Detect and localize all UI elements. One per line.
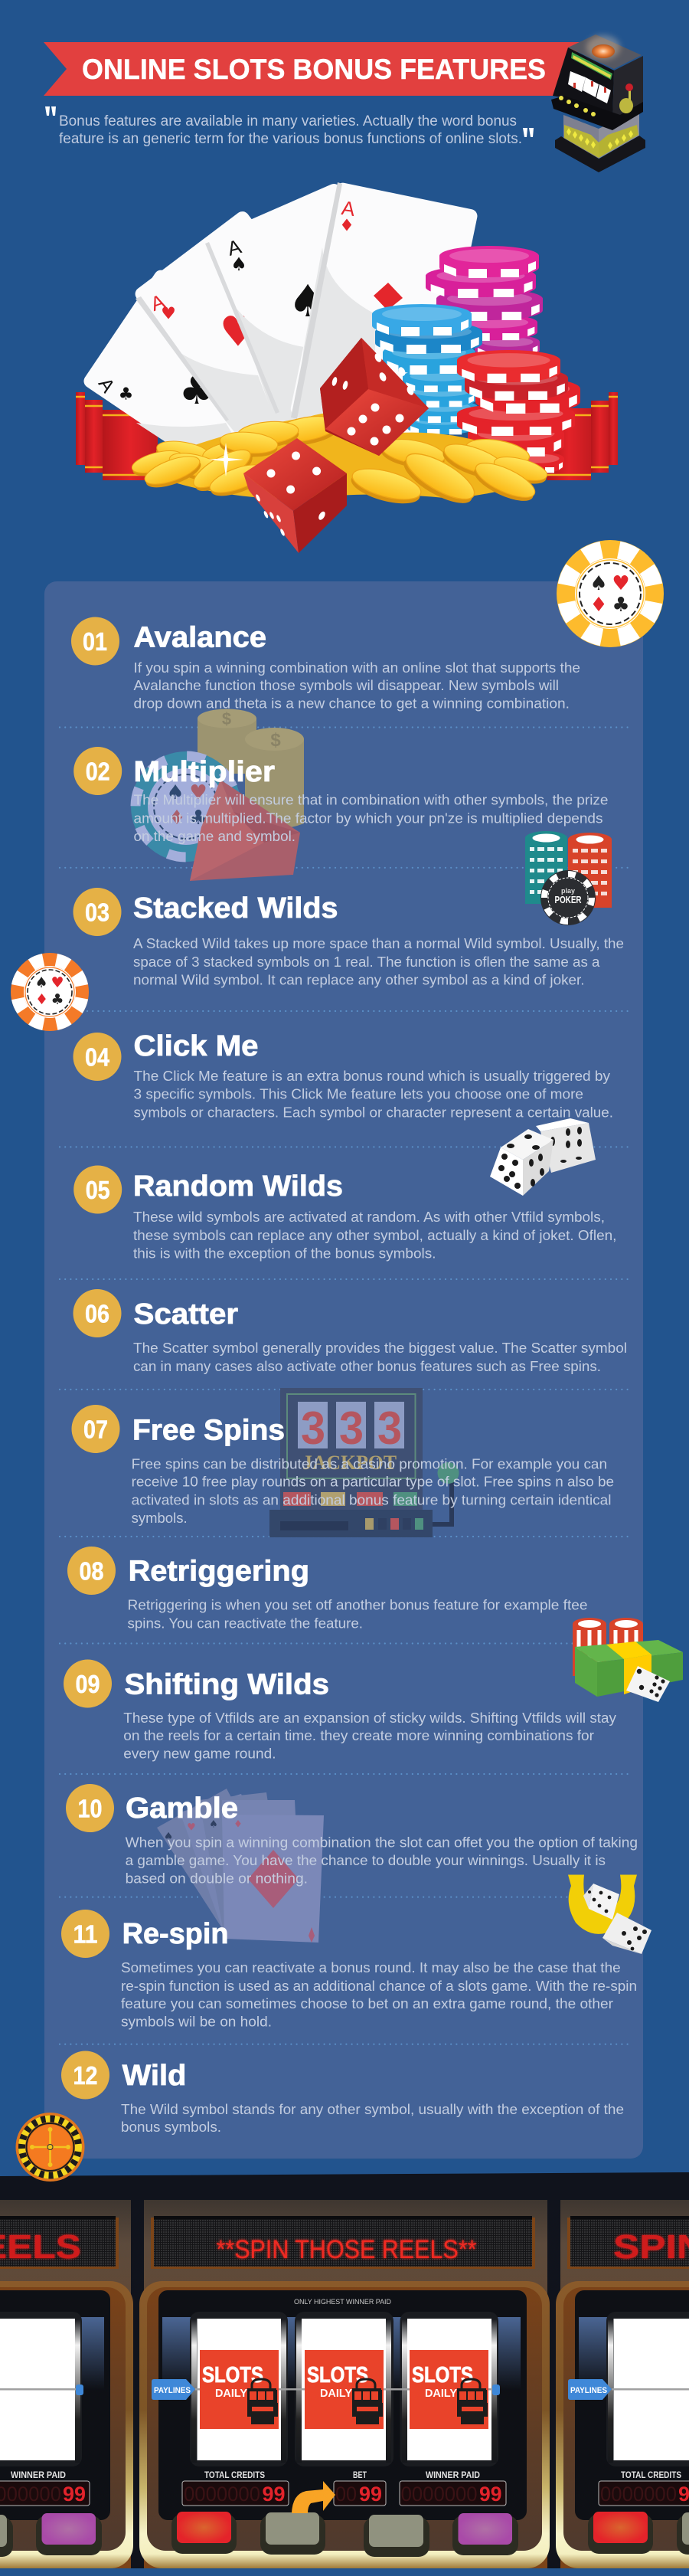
card: ace of diamonds: A xyxy=(340,196,357,221)
body 12: The Wild symbol stands for any other symbol, usually with the exception of the xyxy=(121,2102,624,2117)
body 12 xyxy=(121,2102,624,2135)
faded icon: chip, coins and ruby: ♦ xyxy=(168,807,186,830)
credit readouts: 99 xyxy=(359,2483,382,2506)
credit readouts: 99 xyxy=(479,2483,502,2506)
intro quote: feature is an generic term for the various bonus functions of online slots. xyxy=(59,131,522,147)
card: ace of clubs xyxy=(81,267,324,495)
feature 04: Click Me xyxy=(73,1030,613,1121)
number badge 10 xyxy=(66,1784,114,1832)
heading 04: Click Me xyxy=(133,1030,259,1062)
faded icon: chip, coins and ruby: $ xyxy=(222,709,231,728)
feature 06: Scatter xyxy=(73,1289,627,1374)
machine: left, cropped: WINNER PAID xyxy=(11,2471,66,2480)
card: ace of diamonds: ♦ xyxy=(339,216,354,236)
icon: yellow poker chip xyxy=(557,540,664,647)
body 08 xyxy=(127,1597,588,1631)
card: ace of spades: ♠ xyxy=(230,254,247,275)
icon: white dice xyxy=(490,1118,596,1196)
body 04: symbols or characters. Each symbol or character represent a certain value. xyxy=(133,1105,613,1121)
machine: right, cropped: PAYLINES xyxy=(570,2386,607,2395)
faded icon: jackpot slot machine: 3 xyxy=(339,1403,364,1454)
heading 02: Multiplier xyxy=(133,756,275,788)
panel: features background xyxy=(44,581,643,2159)
body 11: feature you can sometimes choose to bet on an extra game round, the other xyxy=(121,1996,613,2011)
body 03: normal Wild symbol. It can replace any other symbol as a kind of joker. xyxy=(133,972,585,987)
icon: poker chip stacks xyxy=(525,831,612,925)
number badge 03: 03 xyxy=(85,898,109,927)
heading 01: Avalance xyxy=(133,622,266,654)
number badge 07: 07 xyxy=(83,1416,108,1443)
body 02: amount is multiplied.The factor by which your pn'ze is multiplied depends xyxy=(133,810,603,826)
credit readouts xyxy=(184,2471,502,2506)
card: ace of clubs: A xyxy=(94,374,119,397)
body 03 xyxy=(133,936,624,987)
faded icon: chip, coins and ruby xyxy=(131,709,304,881)
hero illustration: cards, chips, coins and dice xyxy=(76,182,618,553)
feature 10: Gamble xyxy=(66,1784,638,1887)
number badge 07 xyxy=(72,1405,119,1453)
reel logo 2 xyxy=(305,2350,384,2429)
faded icon: fan of cards: ♦ xyxy=(233,1818,243,1831)
machine: right, cropped: 0000000 xyxy=(600,2483,677,2506)
feature 07: Free Spins xyxy=(72,1405,614,1526)
body 11 xyxy=(121,1960,637,2030)
heading 06: Scatter xyxy=(133,1298,238,1331)
icon: orange poker chip: ♥ xyxy=(51,974,64,991)
icon: yellow poker chip: ♦ xyxy=(589,594,608,617)
faded icon: chip, coins and ruby: ♥ xyxy=(189,781,207,804)
faded icon: chip, coins and ruby: ♣ xyxy=(189,807,207,830)
die: large xyxy=(320,338,429,456)
body 05: this is with the exception of the bonus symbols. xyxy=(133,1246,436,1262)
body 11: Sometimes you can reactivate a bonus round. It may also be the case that the xyxy=(121,1960,621,1975)
body 08: spins. You can reactivate the feature. xyxy=(127,1615,363,1631)
feature 02: Multiplier xyxy=(73,747,608,844)
chip stack: red xyxy=(457,350,580,473)
heading 07: Free Spins xyxy=(132,1414,285,1446)
icon: orange poker chip: ♦ xyxy=(35,991,48,1008)
number badge 05 xyxy=(73,1166,122,1213)
body 09 xyxy=(123,1710,616,1762)
body 01: If you spin a winning combination with an online slot that supports the xyxy=(133,660,580,676)
body 03: A Stacked Wild takes up more space than a normal Wild symbol. Usually, the xyxy=(133,936,624,951)
body 10: based on double or nothing. xyxy=(126,1871,308,1887)
intro quote xyxy=(45,106,534,147)
body 05 xyxy=(133,1209,616,1262)
machine: centre xyxy=(139,2200,550,2568)
card: ace of hearts xyxy=(132,208,368,460)
number badge 04 xyxy=(73,1033,121,1081)
number badge 09 xyxy=(64,1659,112,1708)
icon: stacked cash, chips and die xyxy=(573,1618,683,1702)
card: ace of clubs: ♣ xyxy=(179,368,214,414)
card: ace of spades xyxy=(205,182,423,434)
number badge 09: 09 xyxy=(75,1670,100,1698)
icon: orange poker chip xyxy=(11,953,89,1031)
feature 12: Wild xyxy=(61,2051,624,2135)
reel logo 3: SLOTS xyxy=(412,2363,473,2388)
number badge 12 xyxy=(61,2051,109,2099)
number badge 02: 02 xyxy=(86,757,110,786)
credit readouts: 99 xyxy=(262,2483,285,2506)
body 09: every new game round. xyxy=(123,1746,276,1762)
icon: roulette wheel xyxy=(15,2113,84,2182)
body 07: activated in slots as an additional bonus feature by turning certain identical xyxy=(132,1493,612,1508)
body 10 xyxy=(126,1835,638,1887)
ribbon behind the hero xyxy=(76,392,618,480)
icon: poker chip stacks: play xyxy=(561,887,575,895)
icon: yellow poker chip: ♠ xyxy=(589,572,608,595)
body 08: Retriggering is when you set otf another bonus feature for example ftee xyxy=(127,1597,588,1612)
reel logo 1: SLOTS xyxy=(202,2363,263,2388)
heading 11: Re-spin xyxy=(122,1918,228,1950)
title: ONLINE SLOTS BONUS FEATURES xyxy=(82,54,546,85)
heading 09: Shifting Wilds xyxy=(124,1668,329,1700)
body 07: Free spins can be distributed as a casino promotion. For example you can xyxy=(132,1457,607,1472)
body 06 xyxy=(133,1340,627,1374)
feature 08: Retriggering xyxy=(67,1547,588,1631)
body 02: on the game and symbol. xyxy=(133,829,296,844)
faded icon: chip, coins and ruby: $ xyxy=(270,730,281,751)
body 04: 3 specific symbols. This Click Me feature lets you choose one of more xyxy=(133,1087,583,1102)
credit readouts: 0000000 xyxy=(401,2483,478,2506)
card: ace of hearts: ♥ xyxy=(161,305,176,323)
faded icon: jackpot slot machine: JACKPOT xyxy=(302,1452,397,1474)
paylines tag: PAYLINES xyxy=(154,2386,191,2395)
machine: right, cropped: TOTAL CREDITS xyxy=(621,2471,681,2480)
chip stack: blue xyxy=(372,304,482,435)
number badge 06: 06 xyxy=(85,1299,109,1328)
faded icon: chip, coins and ruby: ♠ xyxy=(166,781,184,804)
card: ace of spades: ♠ xyxy=(288,275,328,327)
reel logo 3: DAILY xyxy=(425,2387,457,2400)
heading 03: Stacked Wilds xyxy=(133,892,338,925)
body 04 xyxy=(133,1069,613,1121)
number badge 12: 12 xyxy=(73,2061,98,2090)
body 05: these symbols can replace any other symbol, actually a kind of joket. Oflen, xyxy=(133,1228,616,1243)
feature 01: Avalance xyxy=(71,617,580,712)
reel logo 2: SLOTS xyxy=(307,2363,368,2388)
credit readouts: BET xyxy=(353,2471,367,2480)
faded icon: fan of cards xyxy=(157,1789,324,1943)
icon: yellow poker chip: ♥ xyxy=(612,572,630,595)
feature 11: Re-spin xyxy=(61,1910,637,2030)
chip stack: pink xyxy=(426,246,543,358)
faded icon: fan of cards: ♥ xyxy=(187,1822,196,1834)
credit readouts: 0000000 xyxy=(184,2483,260,2506)
die: small xyxy=(243,438,347,553)
faded icon: jackpot slot machine: 3 xyxy=(377,1403,402,1454)
LED display text: **SPIN THOSE REELS** xyxy=(216,2235,476,2264)
winner notice: ONLY HIGHEST WINNER PAID xyxy=(294,2298,391,2306)
number badge 10: 10 xyxy=(78,1794,103,1823)
reel logo 1: DAILY xyxy=(215,2387,247,2400)
reel logo 2: DAILY xyxy=(320,2387,352,2400)
body 02 xyxy=(133,792,608,844)
number badge 01 xyxy=(71,617,119,665)
card: ace of spades: A xyxy=(225,234,244,260)
body 09: These type of Vtfilds are an expansion of sticky wilds. Shifting Vtfilds will stay xyxy=(123,1710,616,1726)
icon: header slot machine xyxy=(551,34,645,172)
body 06: The Scatter symbol generally provides the biggest value. The Scatter symbol xyxy=(133,1340,627,1356)
heading 12: Wild xyxy=(122,2060,186,2092)
icon: orange poker chip: ♣ xyxy=(51,991,64,1008)
credit readouts: TOTAL CREDITS xyxy=(204,2471,265,2480)
feature 05: Random Wilds xyxy=(73,1166,616,1262)
number badge 08: 08 xyxy=(80,1556,104,1586)
body 04: The Click Me feature is an extra bonus round which is usually triggered by xyxy=(133,1069,610,1084)
faded icon: jackpot slot machine xyxy=(269,1388,459,1537)
body 07: receive 10 free play rounds on a particular type of slot. Free spins n also be xyxy=(132,1475,614,1490)
number badge 11: 11 xyxy=(73,1920,98,1949)
reel logo 1 xyxy=(200,2350,279,2429)
feature 09: Shifting Wilds xyxy=(64,1659,616,1762)
title ribbon xyxy=(44,42,580,96)
heading 10: Gamble xyxy=(126,1792,238,1825)
body 10: a gamble game. You have the chance to double your winnings. Usually it is xyxy=(126,1853,606,1868)
body 03: space of 3 stacked symbols on 1 real. The function is oflen the same as a xyxy=(133,954,601,970)
number badge 02 xyxy=(73,747,122,795)
machine: right, cropped xyxy=(556,2200,689,2568)
icon: horseshoe and dice xyxy=(568,1875,651,1954)
faded icon: jackpot slot machine: 3 xyxy=(301,1403,325,1454)
body 12: bonus symbols. xyxy=(121,2119,221,2135)
body 01: Avalanche function those symbols wil disappear. New symbols will xyxy=(133,678,559,693)
body 02: The Multiplier will ensure that in combination with other symbols, the prize xyxy=(133,792,608,807)
body 11: re-spin function is used as an additional chance of a slots game. With the re-spin xyxy=(121,1979,637,1994)
faded icon: fan of cards: ♠ xyxy=(209,1818,218,1831)
machine: left, cropped xyxy=(0,2200,133,2568)
card: ace of hearts: A xyxy=(148,290,168,316)
credit readouts: WINNER PAID xyxy=(426,2471,480,2480)
heading 05: Random Wilds xyxy=(133,1170,343,1203)
body 07: symbols. xyxy=(132,1511,188,1526)
body 11: symbols wil be on hold. xyxy=(121,2015,272,2030)
icon: poker chip stacks: POKER xyxy=(554,894,582,905)
intro quote: Bonus features are available in many varieties. Actually the word bonus xyxy=(59,113,517,129)
dotted dividers xyxy=(60,728,629,2044)
feature 03: Stacked Wilds xyxy=(73,888,624,987)
arrow: orange bend xyxy=(292,2481,335,2513)
body 06: can in many cases also activate other bonus features such as Free spins. xyxy=(133,1359,601,1374)
heading 08: Retriggering xyxy=(129,1556,309,1588)
faded icon: fan of cards: ♠ xyxy=(164,1831,173,1843)
body 01 xyxy=(133,660,580,712)
number badge 01: 01 xyxy=(83,627,107,656)
sparkle xyxy=(208,443,243,476)
credit readouts: 00 xyxy=(335,2483,357,2506)
number badge 03 xyxy=(73,888,121,936)
icon: yellow poker chip: ♣ xyxy=(612,594,630,617)
card: ace of hearts: ♥ xyxy=(220,308,256,355)
slot machines band xyxy=(0,2172,689,2568)
body 01: drop down and theta is a new chance to get a winning combination. xyxy=(133,696,570,712)
number badge 11 xyxy=(61,1910,109,1958)
number badge 05: 05 xyxy=(86,1176,110,1204)
number badge 06 xyxy=(73,1289,121,1337)
number badge 04: 04 xyxy=(85,1043,110,1071)
card: ace of clubs: ♣ xyxy=(119,385,133,404)
icon: orange poker chip: ♠ xyxy=(34,974,48,991)
body 05: These wild symbols are activated at random. As with other Vtfild symbols, xyxy=(133,1209,605,1225)
body 09: on the reels for a certain time. they create more winning combinations for xyxy=(123,1728,594,1743)
body 07 xyxy=(132,1457,614,1526)
card: ace of diamonds xyxy=(289,182,478,444)
machine: left, cropped: 99 xyxy=(63,2483,86,2506)
reel logo 3 xyxy=(410,2350,488,2429)
number badge 08 xyxy=(67,1547,116,1595)
body 10: When you spin a winning combination the slot can offet you the option of taking xyxy=(126,1835,638,1851)
gold coins xyxy=(129,412,550,512)
